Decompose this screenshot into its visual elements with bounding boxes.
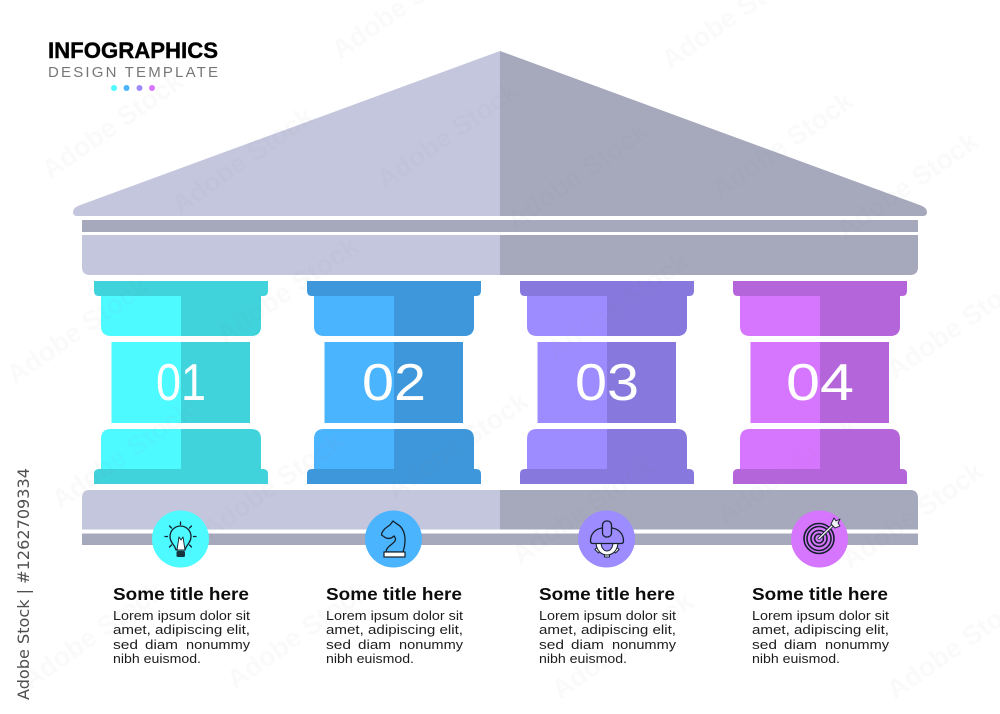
watermark: Adobe Stock [36,65,189,185]
text block 1: amet, adipiscing elit, [113,622,250,637]
icon: helmet and gear [578,510,635,568]
watermark: Adobe Stock [501,115,654,235]
text block 3: amet, adipiscing elit, [539,622,676,637]
text block 1 [113,584,251,666]
watermark: Adobe Stock [221,575,374,695]
text block 2: sed [326,637,351,652]
watermark: Adobe Stock [831,125,984,245]
text block 4: amet, adipiscing elit, [752,622,889,637]
text block 4 [752,584,890,666]
entablature [82,220,918,275]
header colour dots [111,85,155,91]
watermark: Adobe Stock [541,245,694,365]
text block 4: diam [784,637,817,652]
text block 1: Lorem ipsum dolor sit [113,608,250,623]
temple base [82,490,918,545]
text block 2: diam [358,637,391,652]
text block 3: nonummy [612,637,677,652]
text block 4: nibh euismod. [752,651,840,666]
column 01 [94,281,268,484]
text block 2: Lorem ipsum dolor sit [326,608,463,623]
title: INFOGRAPHICS [48,38,218,63]
watermark: Adobe Stock [546,585,699,705]
text block 3 [539,584,677,666]
text block 1: sed [113,637,138,652]
watermark: Adobe Stock [211,230,364,350]
number 02: 02 [362,354,426,412]
subtitle: DESIGN TEMPLATE [48,64,218,81]
watermark: Adobe Stock [381,385,534,505]
text block 3: diam [571,637,604,652]
text block 4: sed [752,637,777,652]
number 04: 04 [786,354,854,412]
watermark: Adobe Stock [16,575,169,695]
icon: chess knight [365,510,422,568]
text block 3: Lorem ipsum dolor sit [539,608,676,623]
text block 2: amet, adipiscing elit, [326,622,463,637]
text block 2: nibh euismod. [326,651,414,666]
header: infographics title [48,38,218,91]
watermark: Adobe Stock [166,100,319,220]
text block 3: Some title here [539,584,675,604]
temple roof [73,51,927,216]
number 03: 03 [575,354,639,412]
watermark: Adobe Stock [1,270,154,390]
watermark: Adobe Stock [836,455,989,575]
icon: light bulb [152,510,209,568]
watermark: Adobe Stock [706,85,859,205]
icon: target with arrow [791,510,848,568]
text block 2 [326,584,464,666]
watermark: Adobe Stock [711,410,864,530]
column 04 [733,281,907,484]
column 03 [520,281,694,484]
text block 1: nonummy [186,637,251,652]
text block 2: Some title here [326,584,462,604]
column 02 [307,281,481,484]
watermark: Adobe Stock [46,395,199,515]
number 01: 01 [156,354,206,412]
watermark: Adobe Stock [371,75,524,195]
text block 1: Some title here [113,584,249,604]
text block 1: nibh euismod. [113,651,201,666]
text block 1: diam [145,637,178,652]
text block 2: nonummy [399,637,464,652]
text block 3: nibh euismod. [539,651,627,666]
text block 4: Some title here [752,584,888,604]
text block 3: sed [539,637,564,652]
watermark: Adobe Stock [506,450,659,570]
stock id side text: Adobe Stock | #1262709334 [14,468,33,700]
watermark: Adobe Stock [196,425,349,545]
text block 4: nonummy [825,637,890,652]
text block 4: Lorem ipsum dolor sit [752,608,889,623]
